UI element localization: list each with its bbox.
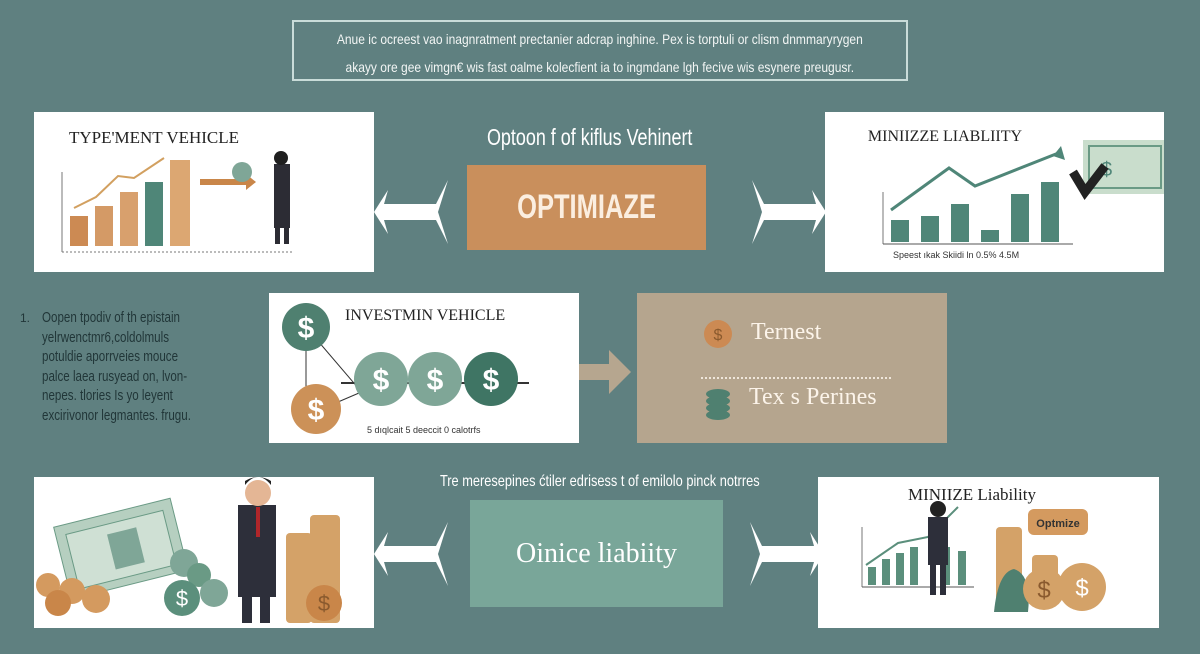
arrow: right top — [752, 180, 825, 244]
panel: type vehicle chart — [34, 112, 374, 272]
text block: left: potuldie aporrveies mouce — [42, 349, 178, 365]
top text box — [292, 20, 908, 81]
text block: left: excirivonor legmantes. frugu. — [42, 408, 191, 424]
arrow: left bottom — [374, 522, 448, 586]
text block: left — [20, 310, 191, 424]
coin network: 5 dıqlcait 5 deeccit 0 calotrfs — [367, 425, 481, 435]
top text box: akayy ore gee vimgn€ wis fast oalme kolecfient ia to ingmdane lgh fecive wis esynere preugusr. — [346, 59, 854, 75]
coin icon: $ — [714, 327, 723, 344]
bar chart — [62, 151, 292, 252]
box: oinice liability — [470, 500, 723, 607]
panel: minimize liability with person: $ — [1037, 577, 1051, 604]
panel: minimize liability with person: $ — [1075, 575, 1089, 602]
panel: money and businessman: $ — [176, 586, 188, 611]
coin stack icon — [706, 389, 730, 420]
heading: INVESTMIN VEHICLE — [345, 307, 505, 324]
coin network: $ — [373, 364, 390, 397]
bar chart: $ — [1101, 159, 1112, 181]
panel: minimize liability with person — [818, 477, 1159, 628]
arrow: mid tan — [579, 350, 631, 394]
panel: money and businessman — [34, 477, 374, 628]
coin network: $ — [483, 364, 500, 397]
heading: TYPE'MENT VEHICLE — [69, 128, 239, 147]
coin network: $ — [308, 394, 325, 427]
arrow: right bottom — [750, 522, 818, 586]
text block: left: yelrwenctmr6,coldolmuls — [42, 330, 169, 346]
panel: minimize liability chart — [825, 112, 1164, 272]
box: optimiaze — [467, 165, 706, 250]
box: ternest / tax periles — [637, 293, 947, 443]
box: ternest / tax periles: Tex s Perines — [749, 384, 877, 410]
caption: bottom center: Tre meresepines ćtiler edrisess t of emilolo pinck notrres — [440, 473, 760, 490]
heading: MINIIZE Liability — [908, 485, 1036, 504]
coin network: $ — [298, 312, 315, 345]
box: oinice liability: Oinice liabiity — [516, 538, 677, 569]
text block: left: Oopen tpodiv of th epistain — [42, 310, 180, 326]
heading: center: Optoon f of kiflus Vehinert — [487, 124, 693, 150]
coin network — [282, 303, 529, 435]
bar chart: Speest ıkak Skiidi ln 0.5% 4.5M — [893, 250, 1019, 260]
bar chart — [882, 140, 1164, 260]
text block: left: 1. — [20, 311, 30, 325]
box: ternest / tax periles: Ternest — [751, 319, 821, 345]
heading: MINIIZZE LIABLIITY — [868, 128, 1022, 145]
panel: minimize liability with person: Optmize — [1036, 518, 1080, 530]
text block: left: palce laea rusyead on, lvon- — [42, 368, 187, 384]
arrow: left top — [374, 180, 448, 244]
coin network: $ — [427, 364, 444, 397]
coin icon — [704, 320, 732, 348]
panel: investment vehicle — [269, 293, 579, 443]
box: optimiaze: OPTIMIAZE — [517, 188, 656, 226]
top text box: Anue ic ocreest vao inagnratment prectanier adcrap inghine. Pex is torptuli or clism dnmmaryrygen — [337, 31, 863, 47]
panel: money and businessman: $ — [318, 591, 330, 616]
text block: left: nepes. tlories Is yo leyent — [42, 388, 173, 404]
